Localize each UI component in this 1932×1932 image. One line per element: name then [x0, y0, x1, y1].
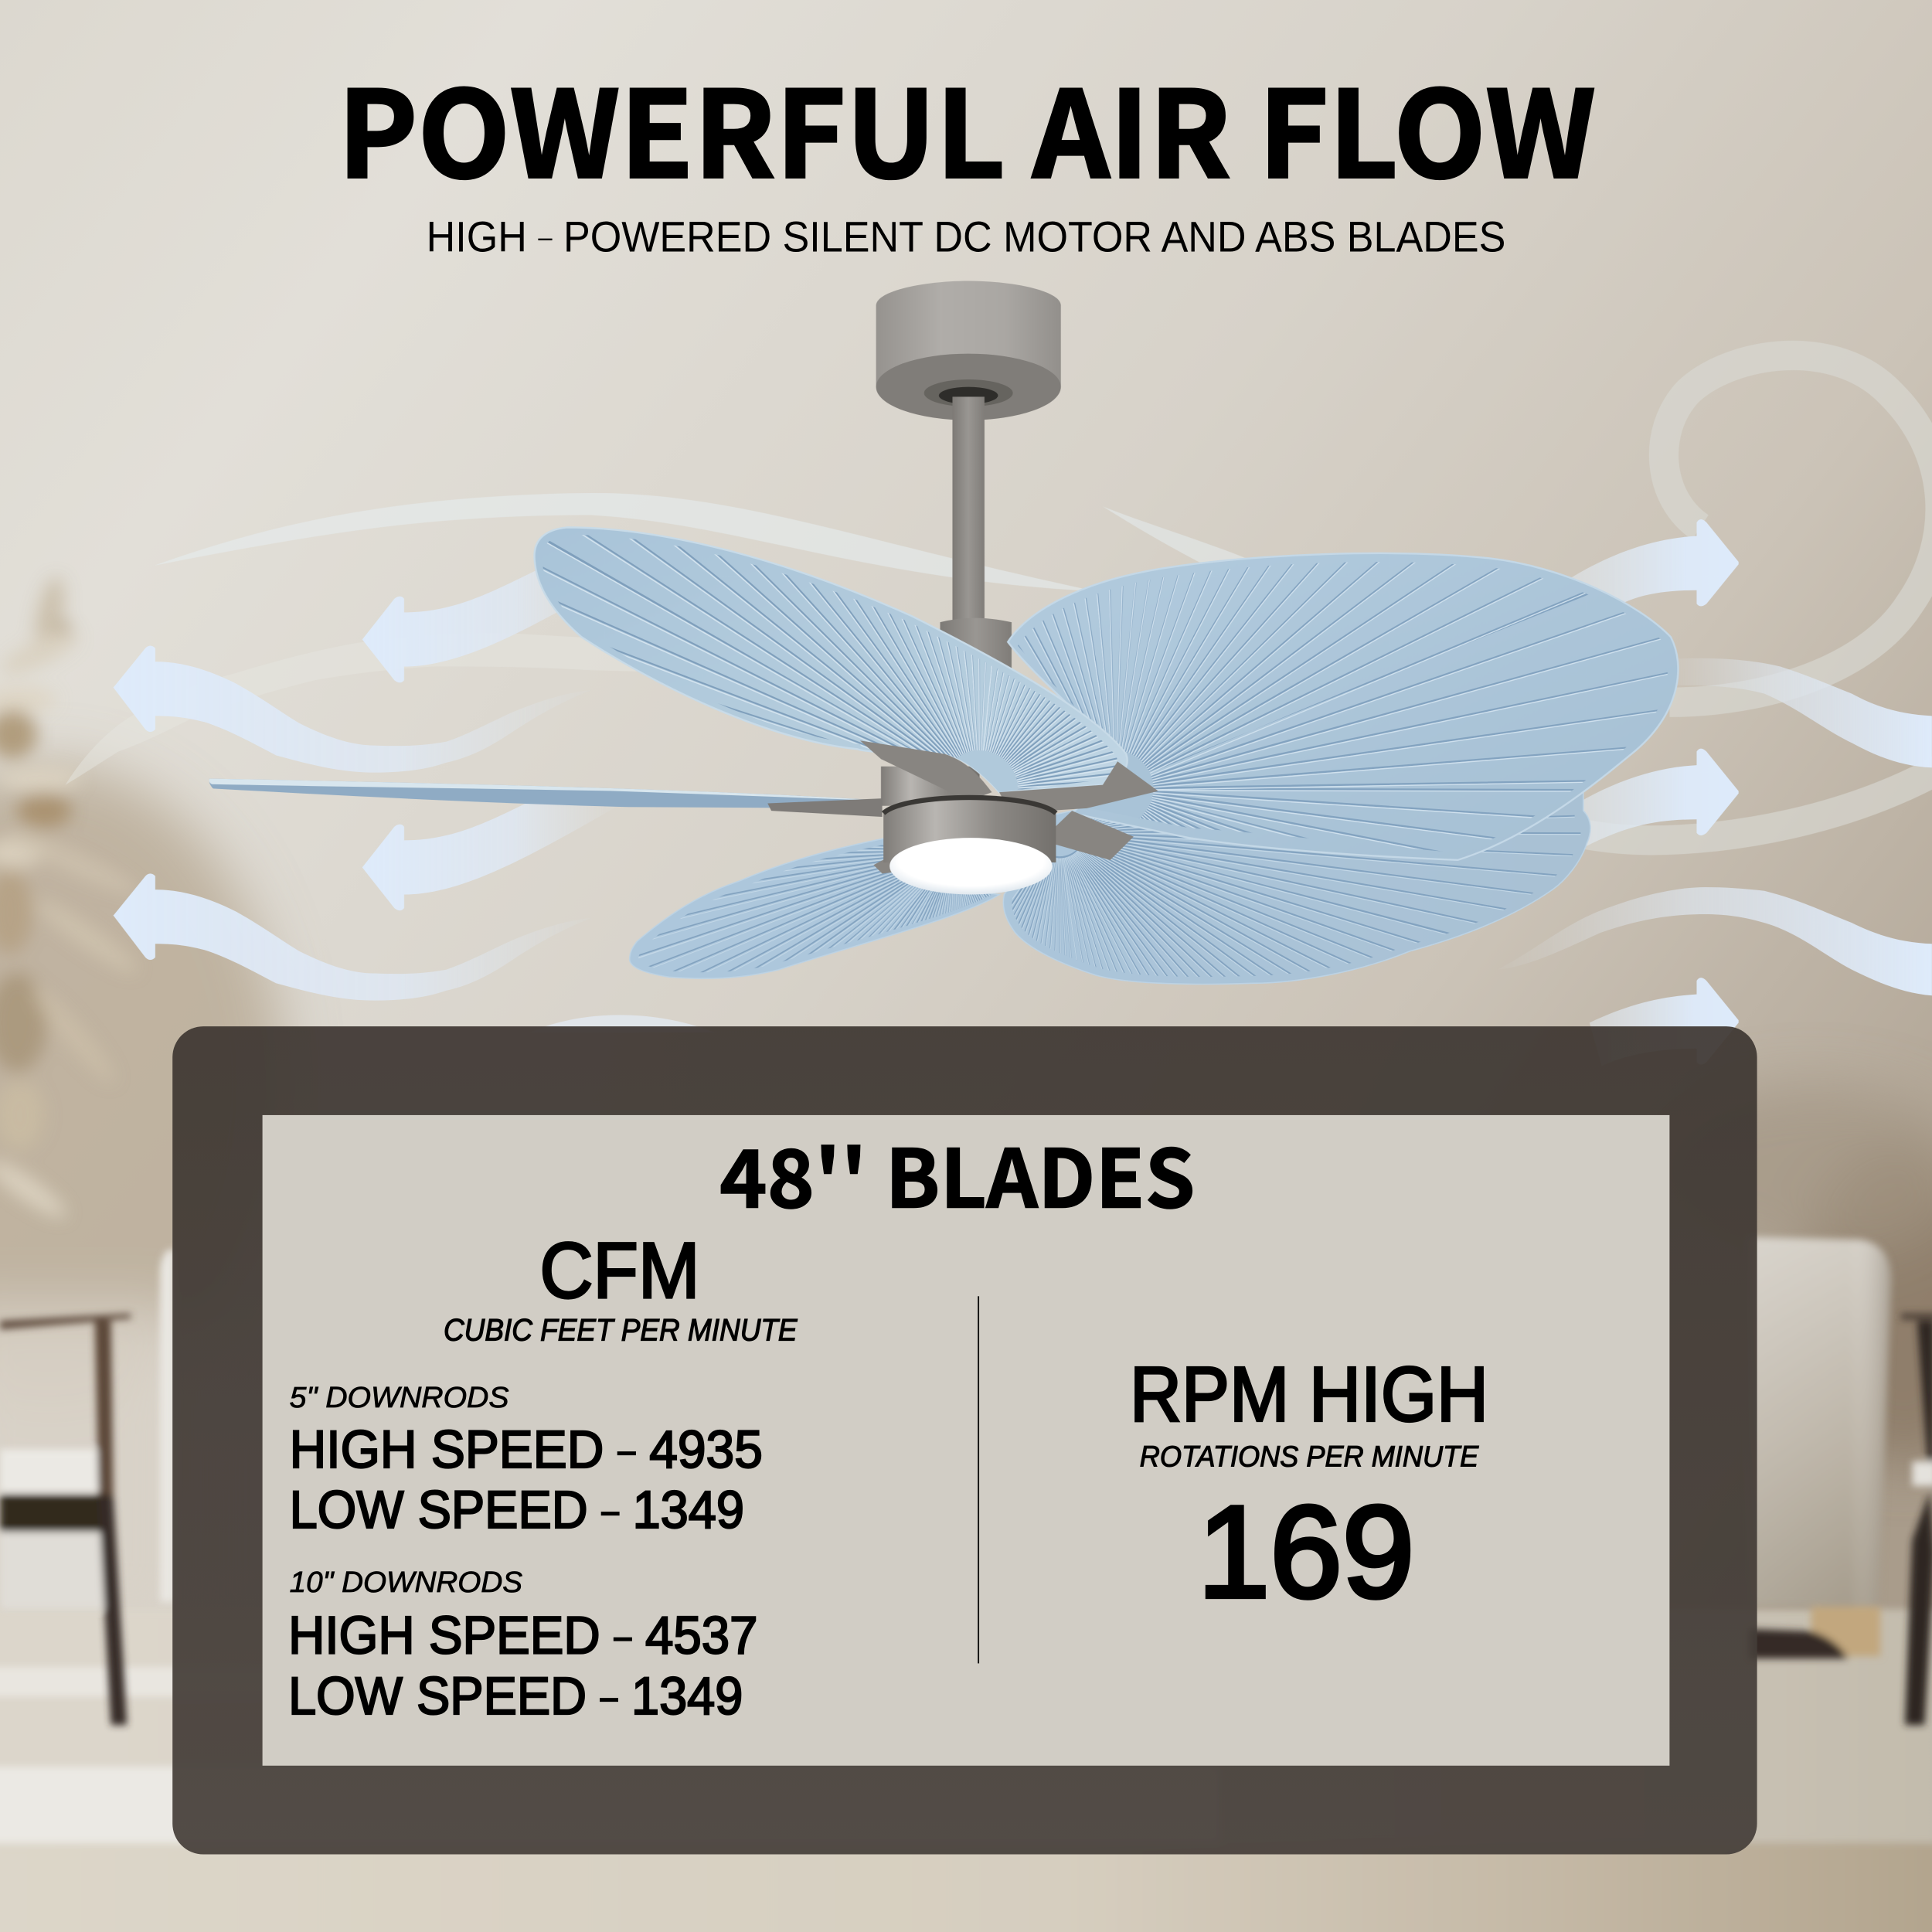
- ceiling fan: [209, 281, 1678, 1111]
- fan: upper housing: [940, 618, 1012, 690]
- fan: lower right blade: [1003, 793, 1591, 985]
- streak: swirl loop: [1664, 355, 1932, 702]
- value: high speed 4537: 4537: [631, 1606, 758, 1665]
- fan: upper motor cylinder: [881, 767, 980, 806]
- streak: lower swirl band: [1577, 761, 1932, 840]
- value: low speed 1349: 1349: [619, 1480, 744, 1539]
- fan: canopy: [876, 281, 1061, 420]
- fan: blade brackets: [767, 740, 1158, 873]
- value: low speed 1349 second: LOW SPEED: [288, 1666, 604, 1726]
- value: high speed 4537: –: [614, 1618, 632, 1655]
- panel: light card: [263, 1115, 1669, 1766]
- label: 10 inch downrods: 10" DOWNRODS: [290, 1566, 522, 1599]
- caption: rotations per minute: ROTATIONS PER MINUTE: [1140, 1440, 1479, 1473]
- label: 5 inch downrods: 5" DOWNRODS: [290, 1381, 509, 1414]
- fan: upper left blade: [533, 526, 1128, 793]
- streak: panel top arc: [530, 1015, 715, 1032]
- arrow: lower left small: [362, 792, 616, 910]
- subtitle: –: [538, 223, 553, 253]
- arrow: upper left wavy: [114, 645, 591, 773]
- wave: upper right: [1663, 658, 1932, 767]
- panel: dark backing: [172, 1026, 1757, 1855]
- subtitle: POWERED SILENT DC MOTOR AND ABS BLADES: [553, 212, 1505, 260]
- value: high speed 4935: HIGH SPEED: [290, 1420, 616, 1479]
- column: CFM: [288, 1226, 798, 1726]
- column: RPM: [1130, 1351, 1488, 1624]
- fan: downrod: [952, 396, 985, 631]
- value: high speed 4935: –: [618, 1432, 636, 1468]
- fan: glowing light: [889, 838, 1053, 895]
- caption: cubic feet per minute: CUBIC FEET PER MINUTE: [444, 1314, 798, 1348]
- value: low speed 1349: LOW SPEED: [290, 1480, 604, 1539]
- value: high speed 4537: HIGH SPEED: [288, 1606, 615, 1665]
- air streams: faint swirl and streaks: [66, 355, 1932, 1032]
- background: white sofa and wooden legs: [160, 1237, 1891, 1658]
- streak: upper centre: [1103, 506, 1252, 579]
- arrow: lower left wavy: [114, 873, 591, 1001]
- streak: top left: [154, 493, 1097, 591]
- arrow: middle right: [1565, 749, 1739, 848]
- fan: edge-on left blade: [209, 779, 889, 808]
- wave: lower right: [1497, 887, 1932, 995]
- fan: lower left blade: [629, 838, 1001, 979]
- subtitle: HIGH: [427, 212, 534, 260]
- heading: RPM high: RPM HIGH: [1130, 1351, 1488, 1437]
- value: low speed 1349 second: –: [600, 1679, 618, 1715]
- background: wall shading: [0, 764, 1932, 1627]
- heading: blade size: 48'' BLADES: [719, 1115, 1196, 1231]
- fan: motor housing: [883, 798, 1056, 862]
- heading: CFM: CFM: [539, 1226, 700, 1315]
- value: 169: 169: [1198, 1478, 1414, 1624]
- background: pampas plant: [0, 575, 144, 1225]
- arrow: upper left small: [362, 564, 616, 682]
- value: low speed 1349 second: 1349: [617, 1666, 743, 1726]
- title: POWERFUL AIR FLOW: [338, 39, 1596, 213]
- spec panel: [172, 1026, 1757, 1855]
- arrow: upper right: [1565, 519, 1739, 616]
- value: low speed 1349: –: [602, 1492, 619, 1529]
- fan: right large blade: [1006, 552, 1679, 861]
- value: high speed 4935: 4935: [635, 1420, 763, 1479]
- background: right chair: [1901, 1314, 1932, 1725]
- streak: left middle: [66, 633, 641, 785]
- background: floor and rug: [0, 1609, 1932, 1932]
- arrow: lower right: [1590, 978, 1739, 1066]
- background: left chair: [0, 1314, 131, 1725]
